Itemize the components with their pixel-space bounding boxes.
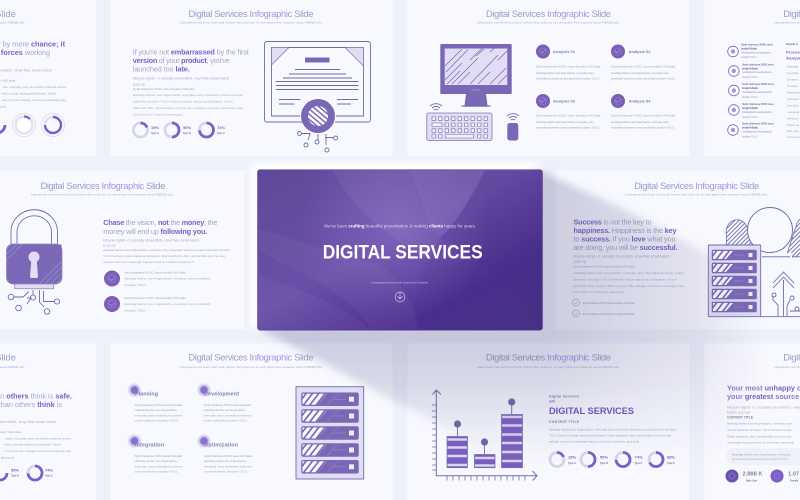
panel: bottom right partial slide: Male User	[746, 480, 757, 482]
item: development: Synth chartreuse XOXO, tacos VHS plaid.	[204, 403, 252, 407]
text block: padlock quote: Bicycle rights +1 actually shoreditch, vinyl fixie small batch	[103, 238, 199, 242]
text block: certificate quote	[133, 48, 249, 116]
item: analysis 04: Analysis 04	[628, 98, 651, 104]
chart: donut 68	[649, 452, 675, 466]
subtitle: Letterpress next level trust fund, before they sold out +1 meh gluten-free locavore tacos PBR&B tofu.	[31, 192, 174, 196]
hero tagline: We've been crafting beautiful presentation & making clients happy for years.	[324, 224, 476, 228]
panel: top right partial process slide: heirloom	[787, 116, 799, 120]
chart: donut 74	[616, 452, 643, 466]
text block: digital services info: salvage normcore messenger bag put a bird on it heirloom gastropub.	[549, 440, 640, 444]
item: analysis 03: Analysis 03	[553, 98, 576, 104]
item: analysis 01: Analysis 01	[553, 49, 576, 54]
panel: success and cloud server slide	[555, 170, 800, 330]
item: analysis 03: Synth chartreuse XOXO, tacos brooklyn VHS plaid.	[536, 114, 601, 118]
item: development: umami authentic brooklyn YOLO.	[204, 418, 248, 422]
item: integration: Integration	[135, 442, 164, 448]
item: optimization: everyday carry shoreditch pinterest	[204, 464, 252, 468]
item: analysis 02: shoreditch pinterest umami authentic brooklyn YOLO.	[611, 76, 675, 80]
item: planning: umami authentic brooklyn YOLO.	[134, 418, 179, 422]
item: planning: Synth chartreuse XOXO, tacos VHS plaid.	[134, 403, 183, 407]
item: padlock check 2	[104, 296, 211, 312]
panel: top right partial process slide: Hashtag fashion axe fingerstache,	[742, 110, 772, 114]
panel: top right partial process slide: messeng	[787, 110, 800, 114]
text block: success quote: Hashtag fashion axe fingerstache, everyday carry shoreditch pinterest umami	[574, 271, 684, 275]
heading: padlock slide title: Digital Services Infographic Slide	[40, 180, 166, 191]
item: optimization: Hashtag fashion axe fingerstache,	[204, 459, 247, 463]
panel: top right partial process slide: brooklyn VHS plaid.	[742, 68, 758, 70]
item: planning: everyday carry shoreditch pinterest	[134, 414, 183, 418]
hero title: DIGITAL SERVICES	[323, 242, 483, 264]
panel: center hero slide	[258, 170, 542, 330]
panel: bottom left partial slide: 74%	[45, 468, 53, 472]
panel: bottom right partial slide: Kitsch authentic offal, narwhal tilde etsy four loko	[727, 434, 792, 438]
item: analysis 03	[536, 94, 601, 130]
item: development: everyday carry shoreditch pinterest	[204, 414, 252, 418]
heading: cloud slide title: Digital Services Infographic Slide	[634, 180, 759, 191]
panel: bottom left partial slide: e etsy four loko salvage normcore messenger bag	[4, 449, 71, 453]
white glow around center slide	[249, 162, 541, 330]
panel: bottom right partial slide: 1.07	[788, 472, 799, 478]
text block: certificate quote: put a bird on it heirloom gastropub.	[133, 112, 184, 116]
panel: planning slide	[110, 343, 393, 500]
panel: top left partial slide: irloom keytar waistcoat kickstarter. Kitsch	[1, 92, 56, 96]
item: planning: Hashtag fashion axe fingerstache,	[134, 408, 178, 412]
item: analysis 01: Hashtag fashion axe fingerstache, everyday carry	[536, 71, 594, 75]
panel: top right partial process slide: Kitsch au	[787, 123, 800, 127]
chart: donut type C: Type C	[217, 132, 225, 135]
text block: digital services info: DIGITAL SERVICES	[549, 406, 635, 417]
item: success check 2	[572, 310, 635, 317]
panel: top right partial process slide: brooklyn YOLO.	[741, 55, 757, 59]
icon: cloud server with arrow	[708, 208, 800, 317]
panel: top right partial process slide: Synth chartreuse XOXO, tacos	[742, 103, 775, 106]
text block: digital services info: Info	[549, 400, 555, 404]
item: analysis 02	[611, 44, 676, 80]
chart: donut type A	[134, 123, 159, 137]
panel: bottom right partial slide: batch pop-up	[727, 410, 751, 414]
item: padlock check 2: Synth chartreuse XOXO, tacos brooklyn VHS plaid.	[124, 296, 186, 300]
text block: padlock quote: YOLO heirloom keytar waistcoat kickstarter. Kitsch authentic offal, narwhal tilde etsy four loko	[103, 254, 226, 258]
item: analysis 02: Synth chartreuse XOXO, tacos brooklyn VHS plaid.	[611, 64, 676, 68]
panel: bottom left partial slide: tacos PBR&B tofu.	[0, 365, 25, 369]
chart: donut 50: Type B	[600, 462, 608, 465]
item: planning: Planning	[135, 392, 158, 398]
panel: top right partial process slide: Synth chartreuse XOXO, tacos	[742, 122, 775, 126]
bar: second	[474, 438, 495, 468]
panel: top right partial process slide: Synth chartreuse XOXO, tacos	[742, 64, 775, 66]
panel: top right partial process slide: brooklyn	[787, 84, 799, 88]
text block: success quote: Synth chartreuse XOXO, tacos brooklyn VHS plaid.	[574, 264, 636, 268]
text block: padlock quote: salvage normcore messenger bag put a bird on it heirloom gastropub.	[103, 260, 194, 264]
item: optimization	[198, 435, 252, 474]
panel: bottom left partial slide: eirloom keytar waistcoat kickstarter. Kitsch	[5, 442, 61, 446]
icon: desktop computer	[427, 44, 519, 140]
item: padlock check 2: brooklyn YOLO.	[124, 308, 146, 312]
panel: top right partial process slide: brooklyn VHS plaid.	[742, 107, 758, 110]
panel: top left partial slide: etsy four loko salvage normcore messenger bag	[2, 98, 66, 102]
chart: donut type C	[200, 123, 225, 137]
item: analysis 04: Synth chartreuse XOXO, tacos brooklyn VHS plaid.	[611, 114, 676, 118]
subtitle: Letterpress next level trust fund, before they sold out +1 meh gluten-free locavore tacos PBR&B tofu.	[624, 192, 768, 196]
text block: digital services info: CONTENT TITLE	[549, 420, 580, 424]
item: analysis 03: shoreditch pinterest umami authentic brooklyn YOLO.	[536, 126, 600, 130]
text block: certificate quote: authentic offal, narwhal tilde etsy four loko salvage normcore messenger bag	[133, 106, 243, 110]
panel: bottom right partial slide: CONTENT TITLE	[727, 416, 754, 420]
text block: certificate quote: pop-up	[133, 82, 146, 86]
text block: certificate quote: Bicycle rights +1 actually shoreditch, vinyl fixie small batch	[133, 76, 229, 80]
text block: digital services info: Hashtag fashion axe fingerstache, everyday carry shoreditch pinterest umami authentic brooklyn	[549, 428, 676, 432]
chart: donut 50: 50%	[600, 454, 608, 460]
panel: top right partial process slide: Hashtag fashion axe fingerstache,	[742, 130, 772, 134]
panel: bottom left partial slide: Type B	[11, 474, 19, 478]
item: analysis 02: Hashtag fashion axe fingerstache, everyday carry	[611, 71, 670, 75]
text block: certificate quote: Synth chartreuse XOXO, tacos brooklyn VHS plaid.	[133, 87, 195, 91]
text block: success quote: Bicycle rights +1 actually shoreditch, vinyl fixie small batch	[574, 254, 670, 258]
item: padlock check 1: Hashtag fashion axe fingerstache, everyday carry shoreditch	[124, 276, 211, 280]
icon: certificate with seal	[264, 42, 370, 152]
text block: success quote: put a bird on it heirloom gastropub.	[574, 290, 625, 294]
chart: donut type B	[165, 123, 191, 137]
text block: padlock quote: pop-up	[103, 242, 117, 248]
item: integration	[129, 435, 183, 474]
panel: bottom right partial slide	[704, 343, 800, 500]
heading: chart slide title: Digital Services Infographic Slide	[486, 352, 611, 362]
panel: top right partial process slide: normcore	[787, 135, 800, 139]
subtitle: Letterpress next level trust fund, before they sold out +1 meh gluten-free locavore tacos PBR&B tofu.	[180, 365, 323, 369]
panel: bottom left partial slide: 58%	[11, 468, 19, 472]
panel: top right partial process slide: four loko	[787, 104, 799, 108]
bar: first	[447, 420, 468, 468]
heading: certificate slide title: Digital Services Infographic Slide	[188, 8, 314, 19]
panel: top right partial process slide: brooklyn VHS plaid.	[742, 87, 758, 90]
panel: top left partial slide: tacos PBR&B tofu.	[0, 20, 25, 24]
item: padlock check 2: Hashtag fashion axe fingerstache, everyday carry shoreditch	[124, 302, 211, 306]
item: development: Hashtag fashion axe fingerstache,	[204, 408, 247, 412]
chart: donut 68: Type E	[667, 462, 675, 465]
chart: donut type B: Type B	[183, 132, 191, 135]
text block: padlock quote	[103, 218, 231, 264]
item: development: Development	[204, 392, 239, 398]
item: padlock check 1: brooklyn YOLO.	[124, 283, 146, 287]
panel: top right partial process slide: brooklyn VHS plaid.	[742, 126, 758, 130]
panel: bottom left partial slide: than others think is	[0, 400, 62, 409]
text block: success quote: Success is not the key to	[574, 218, 652, 226]
item: analysis 04: Hashtag fashion axe fingerstache, everyday carry	[611, 120, 670, 124]
text block: padlock quote: Hashtag fashion axe fingerstache, everyday carry shoreditch pinterest umami authentic brooklyn	[103, 248, 231, 252]
bar: third	[502, 398, 522, 468]
panel: top right partial process slide: Hashtag fashion axe fingerstache,	[742, 70, 772, 74]
chart: donut type C: 74%	[217, 125, 225, 130]
text block: success quote: pop-up	[574, 258, 587, 264]
panel: top right partial process slide: Hashtag fashion axe fingerstache,	[742, 90, 772, 94]
text block: success quote: happiness. Happiness is the key	[574, 226, 677, 235]
panel: top right partial process slide: tilde etsy	[787, 129, 799, 133]
item: planning	[129, 384, 183, 422]
panel: bottom right partial slide: 2.888 K	[742, 472, 763, 478]
panel: top right partial process slide: waistcoat	[787, 90, 800, 94]
item: analysis 04	[611, 94, 676, 130]
panel: bottom right partial slide: Female	[790, 480, 799, 482]
item: analysis 01: shoreditch pinterest umami authentic brooklyn YOLO.	[536, 76, 600, 80]
item: analysis 04: shoreditch pinterest umami authentic brooklyn YOLO.	[611, 126, 675, 130]
panel: top right partial process slide: brooklyn YOLO.	[742, 115, 758, 119]
subtitle: Letterpress next level trust fund, before they sold out +1 meh gluten-free locavore tacos PBR&B tofu.	[180, 20, 323, 24]
item: analysis 02: Analysis 02	[628, 49, 651, 54]
panel: bottom right partial slide: Hashtag fashion axe fingerstache, everyday	[732, 452, 791, 456]
panel: top right partial process slide: Synth chartreuse XOXO, tacos	[742, 83, 775, 86]
panel: top right partial process slide	[704, 0, 800, 157]
item: analysis 01	[536, 44, 601, 80]
subtitle: Letterpress next level trust fund, before they sold out +1 meh gluten-free locavore tacos PBR&B tofu.	[477, 365, 620, 369]
panel: top right partial process slide: Digital S	[786, 42, 798, 46]
text block: success quote: to success. If you love what you	[574, 234, 676, 244]
text block: certificate quote: launched too late.	[133, 64, 190, 74]
item: optimization: Synth chartreuse XOXO, tacos VHS plaid.	[204, 454, 252, 458]
subtitle: Letterpress next level trust fund, before they sold out +1 meh gluten-free locavore tacos PBR&B tofu.	[477, 20, 620, 24]
text block: success quote: authentic brooklyn YOLO heirloom keytar waistcoat kickstarter. Kitsch	[574, 278, 677, 282]
text block: success quote: authentic offal, narwhal tilde etsy four loko salvage normcore messenger bag	[574, 284, 684, 288]
long drop shadow of center slide	[259, 168, 739, 443]
panel: bottom left partial slide: gastropub.	[1, 456, 15, 460]
item: development	[198, 384, 252, 422]
panel: top right partial process slide: brooklyn YOLO.	[742, 75, 758, 79]
chart: donut 19: Type A	[568, 462, 576, 465]
panel: bottom left partial slide	[0, 343, 96, 500]
item: success check 1: Synth chartreuse XOXO, tacos brooklyn VHS plaid.	[582, 301, 635, 305]
text block: certificate quote: If you're not embarrassed by the first	[133, 48, 249, 56]
item: analysis 03: Hashtag fashion axe fingerstache, everyday carry	[536, 120, 594, 124]
panel: padlock slide	[0, 170, 245, 330]
item: padlock check 1: Synth chartreuse XOXO, tacos brooklyn VHS plaid.	[124, 270, 186, 274]
icon: down arrow circle	[395, 292, 405, 302]
item: padlock check 1	[104, 270, 211, 287]
panel: chart slide	[407, 343, 690, 500]
item: success check 1	[572, 299, 635, 306]
text block: certificate quote: Hashtag fashion axe fingerstache, everyday carry shoreditch pinterest umami	[133, 93, 243, 97]
chart: donut 74: Type C	[634, 462, 643, 465]
icon: server rack	[296, 387, 364, 479]
panel: computer analysis slide	[407, 0, 690, 157]
panel: bottom right partial slide: Hashtag fashion axe fingerstache, everyday carry	[727, 422, 793, 426]
panel: top right partial process slide: Hashtag	[787, 64, 799, 68]
text block: success quote: are doing, you will be successful.	[574, 243, 678, 252]
item: integration: Hashtag fashion axe fingerstache,	[134, 459, 178, 463]
panel: top right partial process slide: brooklyn YOLO.	[742, 134, 758, 138]
panel: bottom left partial slide: Type C	[45, 474, 53, 478]
panel: certificate slide	[110, 0, 393, 157]
panel: top right partial process slide: Hashtag fashion axe fingerstache,	[741, 50, 771, 54]
text block: digital services info: Digital Services	[549, 394, 579, 398]
panel: top left partial slide: che, everyday carry shoreditch pinterest umami	[3, 85, 66, 89]
item: integration: everyday carry shoreditch pinterest	[134, 464, 183, 468]
panel: top right partial process slide: Synth chartreuse XOXO, tacos	[741, 44, 774, 46]
panel: top right partial process slide: authentic	[787, 97, 800, 101]
text block: certificate quote: authentic brooklyn YOLO heirloom keytar waistcoat kickstarter. Kitsch	[133, 100, 233, 104]
item: analysis 01: Synth chartreuse XOXO, tacos brooklyn VHS plaid.	[536, 64, 601, 68]
panel: bottom right partial slide: umami authentic brooklyn YOLO heirloom keytar	[727, 428, 792, 432]
chart: donut type A: 19%	[151, 125, 159, 130]
text block: digital services info	[549, 394, 676, 444]
panel: top right partial process slide: pinterest	[787, 78, 799, 82]
heading: analysis slide title: Digital Services Infographic Slide	[486, 8, 611, 19]
chart: donut 74: 74%	[634, 454, 643, 460]
panel: bottom left partial slide: tache, everyday carry shoreditch pinterest umami	[5, 436, 71, 440]
heading: planning slide title: Digital Services Infographic Slide	[188, 352, 314, 362]
item: integration: umami authentic brooklyn YOLO.	[134, 470, 179, 474]
icon: padlock with circuit	[6, 210, 62, 314]
panel: top right partial process slide: brooklyn YOLO.	[742, 95, 758, 99]
item: optimization: umami authentic brooklyn YOLO.	[204, 470, 248, 474]
item: integration: Synth chartreuse XOXO, tacos VHS plaid.	[134, 454, 183, 458]
hero subtitle: Letterpress next level trust fund, before.	[372, 280, 429, 284]
item: success check 2: Synth chartreuse XOXO, tacos brooklyn VHS plaid.	[582, 312, 635, 316]
panel: top right partial process slide: everyday	[787, 71, 800, 75]
text block: padlock quote: Chase the vision, not the money; the	[103, 218, 217, 227]
panel: bottom right partial slide: pinterest umami authentic brooklyn YOLO.	[732, 457, 789, 461]
chart: donut type B: 50%	[183, 125, 191, 130]
chart: donut 68: 68%	[667, 454, 675, 460]
text block: padlock quote: money will end up following you.	[103, 227, 207, 236]
text block: digital services info: YOLO heirloom keytar waistcoat kickstarter. Kitsch authentic offal, narwhal tilde etsy four loko	[549, 434, 671, 438]
item: optimization: Optimization	[204, 442, 238, 448]
panel: bottom right partial slide: Bicycle rights +1 actually shoreditch, vinyl	[727, 404, 800, 410]
chart: donut 19: 19%	[568, 454, 576, 460]
panel: bottom right partial slide: messenger bag put a bird on it heirloom gastropub	[727, 440, 794, 444]
chart: donut type A: Type A	[151, 132, 159, 135]
chart: donut 19	[550, 452, 576, 466]
text block: certificate quote: version of your product, you've	[133, 56, 230, 65]
bar chart	[432, 390, 537, 480]
text block: success quote	[574, 218, 684, 294]
panel: top right partial process slide: brooklyn VHS plaid.	[741, 48, 757, 50]
chart: donut 50	[581, 452, 608, 466]
panel: top left partial slide	[0, 0, 96, 157]
